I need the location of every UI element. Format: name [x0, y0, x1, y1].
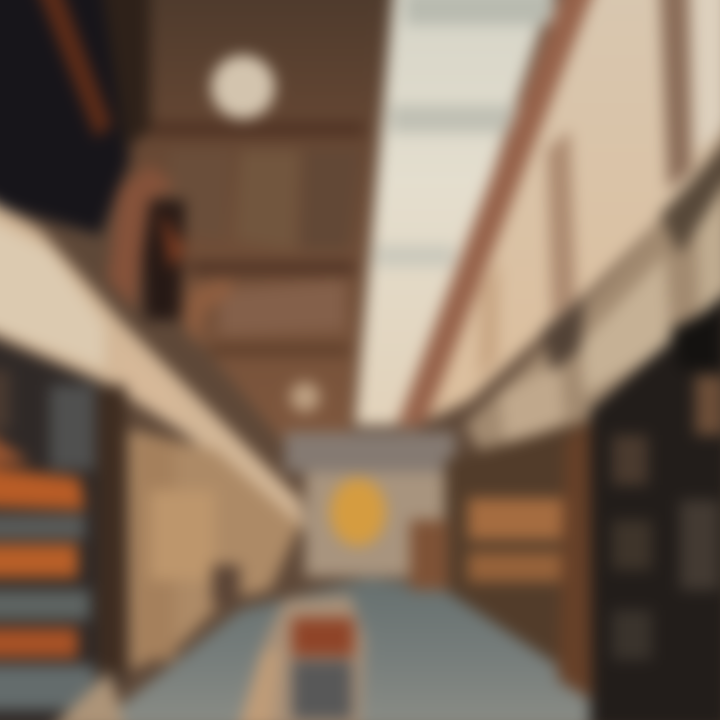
right upper shelf band	[465, 120, 720, 470]
orange shelf stripes	[0, 400, 85, 658]
right cream wall	[405, 0, 720, 430]
end light	[330, 478, 386, 546]
skylight	[355, 0, 570, 425]
left shelves	[0, 320, 300, 720]
right shelf post	[558, 420, 592, 700]
right dark shelves	[590, 290, 720, 720]
ceiling	[80, 0, 395, 450]
round ceiling light	[211, 55, 275, 119]
far end wall	[285, 432, 455, 577]
diagonal roof beam	[397, 0, 692, 425]
red streak beam	[18, 0, 232, 345]
floor	[90, 578, 650, 720]
cart in foreground	[238, 595, 365, 720]
right lower shelves, mid distance	[410, 420, 590, 690]
foreground pillar glow	[50, 670, 125, 720]
top left dark area	[0, 0, 185, 320]
left cream beam	[0, 170, 305, 530]
